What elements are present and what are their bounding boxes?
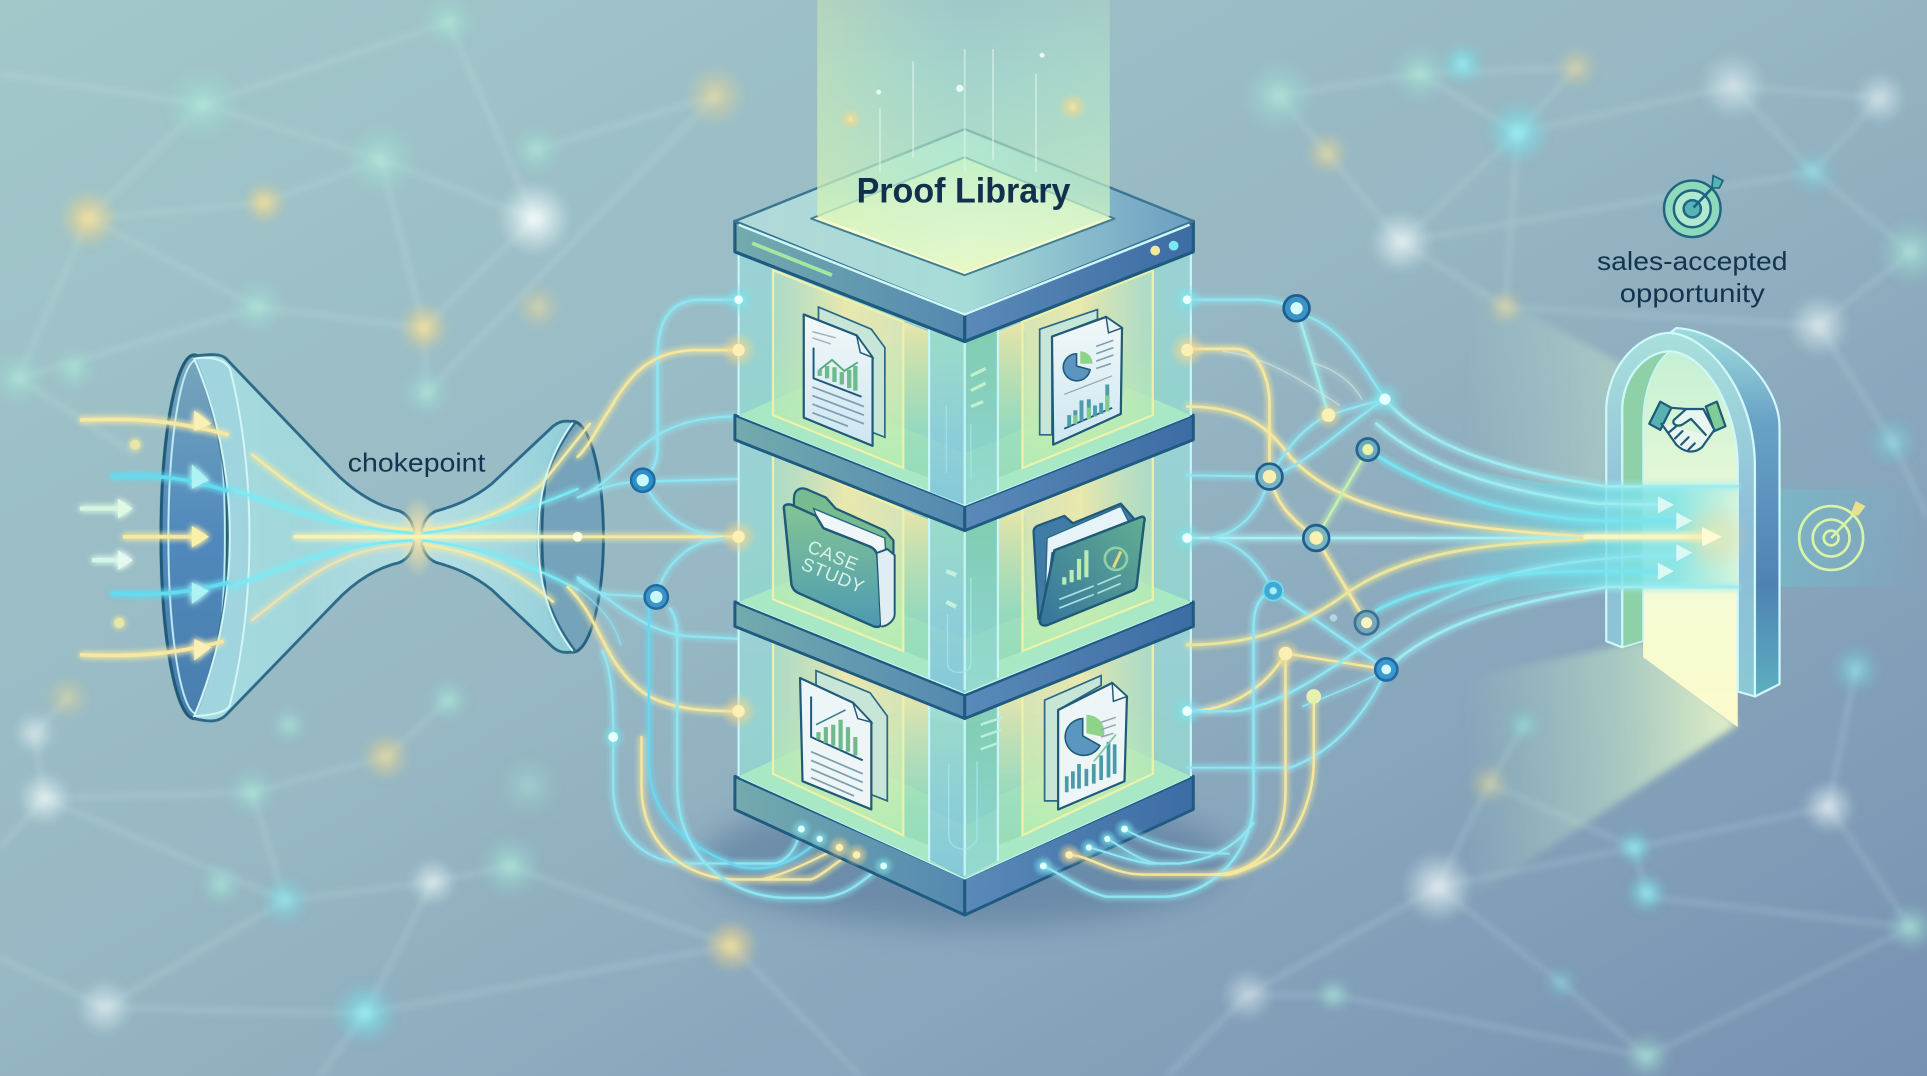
input arrows [80,410,229,661]
document: pie chart report [1040,310,1122,445]
funnel right body [422,421,575,653]
bay 3 glass [739,624,1191,878]
right connector network and streams [1043,300,1751,897]
base port nodes [790,818,1136,877]
funnel inner streams [231,424,590,620]
door front frame [1606,333,1755,696]
tower: Proof Library [735,129,1193,915]
shelf 2 slab [735,602,1193,719]
shelf 1 slab [735,415,1193,531]
flow arrowheads [1658,496,1722,580]
base slab [735,776,1193,915]
document: bar chart report [800,671,887,809]
funnel left back opening [161,355,227,719]
glowing top opening [811,157,1115,275]
chokepoint glow [398,495,438,579]
icon: target top [1664,176,1723,237]
bay 1 glass [739,252,1191,505]
top slab [735,129,1193,341]
light cones from the door [1462,285,1927,897]
funnel right rim line [538,423,573,651]
left tower edge nodes [573,284,757,750]
light beam [817,0,1110,273]
top slab indicator lights [1150,241,1179,255]
door glow [1678,500,1751,574]
funnel right back opening [542,421,603,652]
door right side face [1670,328,1780,696]
title: Proof Library: Proof Library [857,171,1071,211]
funnel left body [194,355,414,721]
folder: case study [784,488,895,627]
flow band into door [1426,457,1738,620]
door arch [1606,328,1780,727]
left connector network [568,300,884,898]
icon: handshake [1649,402,1725,452]
label: sales-accepted opportunity [1597,248,1788,308]
top slab status bar [752,243,832,275]
funnel left ring highlight [168,360,225,714]
label: sales-accepted opportunity: opportunity [1620,280,1765,308]
door left inner side [1622,351,1670,647]
door light opening [1643,351,1738,727]
label: chokepoint: chokepoint [348,450,485,478]
icon: target right [1799,501,1866,570]
tower ground shadow [701,792,1229,927]
right tower edge nodes [1169,284,1206,727]
folder label line 2: STUDY [799,553,868,597]
bay 2 glass [739,440,1191,693]
document: line chart report [804,307,885,446]
label: sales-accepted opportunity: sales-accepted [1597,248,1788,276]
document: pie and bars report [1045,676,1127,809]
folder label: CASE [805,536,862,575]
connector nodes [573,284,1403,877]
right network ring nodes [1257,295,1403,704]
funnel: chokepoint [161,355,603,721]
folder: data report [1034,504,1145,626]
funnel left rim [194,358,249,716]
